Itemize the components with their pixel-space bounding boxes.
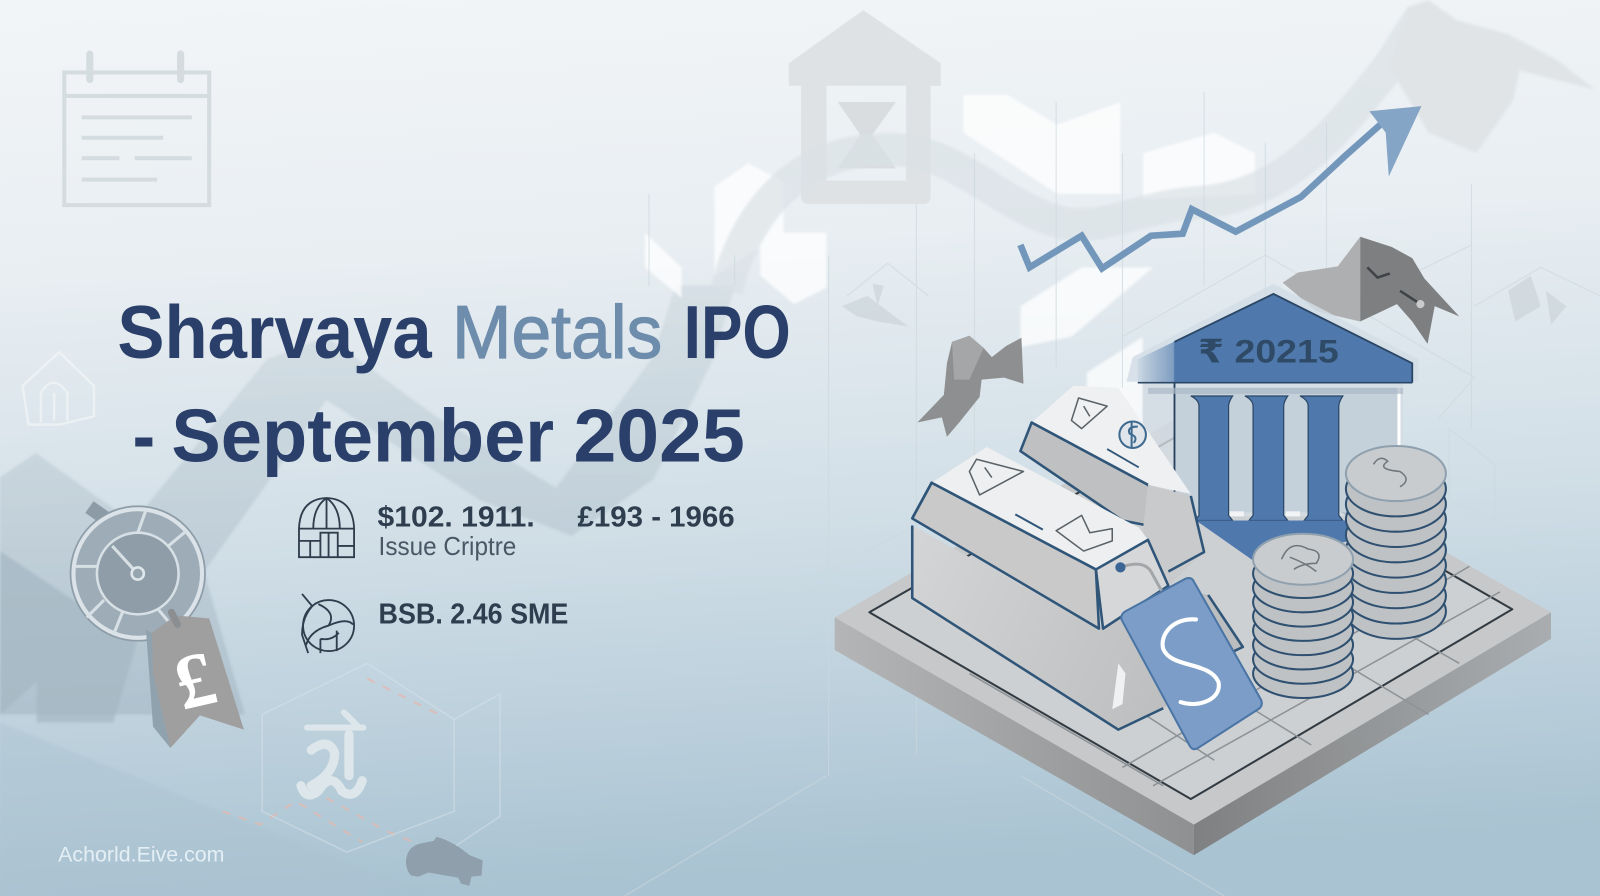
icon: globe with bar chart: [299, 498, 354, 557]
background white facets: [645, 95, 1255, 490]
icon: ghost house left: [22, 352, 94, 425]
listing info: BSB. 2.46 SME: [379, 599, 568, 631]
background ghost swoosh and mountain: [727, 0, 1595, 291]
illustration: lower silver bar: [912, 526, 1243, 730]
illustration: front silver bar: [912, 447, 1168, 629]
title: September: [171, 394, 554, 478]
illustration: rock left: [917, 336, 1023, 437]
illustration: isometric platform: [835, 408, 1551, 855]
illustration: coin stack left: [1253, 534, 1353, 698]
issue price values: £193 - 1966: [578, 502, 735, 534]
icon: stopwatch: [70, 501, 205, 641]
background grid lines: [624, 92, 1600, 896]
issue price values: [378, 502, 735, 534]
illustration: rock right: [1283, 237, 1459, 344]
icon: car silhouette: [406, 837, 483, 886]
title: Metals: [452, 291, 662, 375]
illustration: coin stack right: [1346, 446, 1446, 639]
issue price values: $102. 1911.: [378, 502, 535, 534]
title: IPO: [684, 291, 791, 375]
title: -: [133, 394, 155, 478]
icon: price tag with pound sign: [146, 612, 244, 748]
title: Sharvaya: [117, 291, 433, 375]
icon: price tag with pound sign: £: [167, 634, 224, 727]
background ghost zigzag band: [0, 286, 735, 896]
title: 2025: [573, 394, 745, 478]
icon: rupee style glyph: [301, 712, 363, 795]
bank price text: ₹ 20215: [1198, 332, 1339, 369]
rising arrow: [1020, 106, 1421, 268]
icon: map globe: [302, 594, 354, 653]
title: [117, 291, 791, 478]
icon: faint metal fragments: [842, 276, 1566, 327]
network: pale hexagon outline: [262, 663, 500, 852]
network: dashed orange connections: [222, 679, 439, 852]
illustration: hanging price tag: [1115, 562, 1262, 749]
icon: ghost house with hourglass: [789, 10, 941, 204]
issue price label: Issue Criptre: [379, 533, 516, 561]
illustration: bank building: [1127, 284, 1418, 563]
icon: ghost calendar: [64, 54, 209, 205]
illustration: rear silver bar: [1020, 386, 1204, 586]
footer url: Achorld.Eive.com: [58, 843, 224, 866]
